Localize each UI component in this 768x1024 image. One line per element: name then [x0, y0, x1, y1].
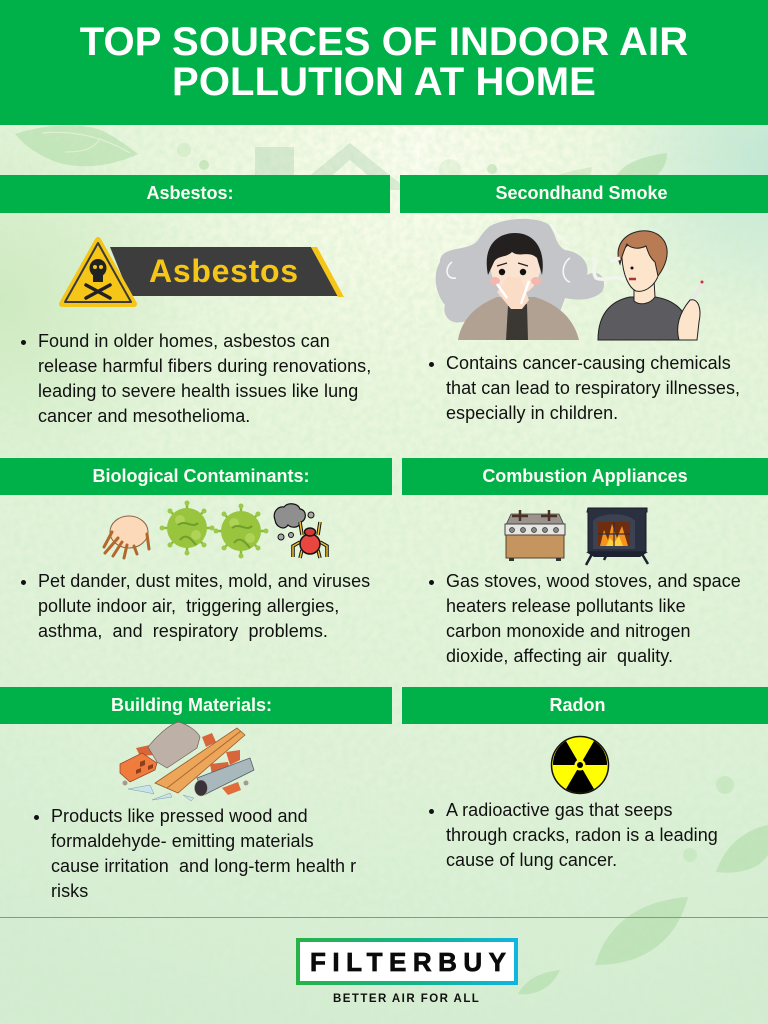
panel: biological contaminants [0, 458, 392, 641]
panel: building materials [0, 687, 392, 901]
heading: building materials [0, 687, 392, 724]
icon: rubble, brick, plank and pipe [120, 722, 254, 802]
text: radon description [429, 800, 718, 870]
text: building materials description [34, 806, 356, 901]
icon: virus two [214, 504, 268, 558]
text: combustion appliances description: Gas stoves, wood stoves, and space [446, 571, 741, 591]
heading: radon [402, 687, 768, 724]
text: asbestos description: release harmful fibers during renovations, [38, 356, 371, 376]
text: building materials description: cause irritation and long-term health r [51, 856, 356, 876]
icon: wood stove [584, 508, 649, 566]
text: secondhand smoke description: especially in children. [446, 403, 618, 423]
heading: combustion appliances [402, 458, 768, 495]
heading: biological contaminants [0, 458, 392, 495]
text: asbestos description: Found in older homes, asbestos can [38, 331, 330, 351]
logo box [296, 938, 518, 985]
text: secondhand smoke description [429, 353, 740, 423]
title banner [0, 0, 768, 125]
heading: secondhand smoke: Secondhand Smoke [495, 183, 668, 203]
text: biological contaminants description [21, 571, 370, 641]
text: building materials description: Products like pressed wood and [51, 806, 308, 826]
text: biological contaminants description: pollute indoor air, triggering allergies, [38, 596, 339, 616]
panel: combustion appliances [402, 458, 768, 666]
heading: biological contaminants: Biological Contaminants: [92, 466, 310, 486]
text: asbestos description: cancer and mesothelioma. [38, 406, 250, 426]
panel: secondhand smoke [114, 175, 768, 792]
heading: secondhand smoke [400, 175, 768, 213]
panel: asbestos [0, 175, 390, 757]
icon: gas stove [504, 510, 566, 561]
icon: dust mite [102, 516, 150, 560]
icon: virus one [160, 500, 214, 556]
text: radon description: through cracks, radon is a leading [446, 825, 718, 845]
tagline: BETTER AIR FOR ALL [333, 993, 480, 1005]
text: combustion appliances description: carbon monoxide and nitrogen [446, 621, 691, 641]
icon: smoke cloud and red mite [274, 503, 329, 558]
text: combustion appliances description: dioxide, affecting air quality. [446, 646, 673, 666]
heading: asbestos [0, 175, 390, 213]
title banner: TOP SOURCES OF INDOOR AIR [80, 20, 688, 64]
text: secondhand smoke description: that can lead to respiratory illnesses, [446, 378, 740, 398]
icon: asbestos warning sign [59, 237, 344, 757]
logo: Filterbuy [296, 938, 518, 1005]
text: secondhand smoke description: Contains cancer-causing chemicals [446, 353, 731, 373]
heading: radon: Radon [550, 695, 606, 715]
text: radon description: A radioactive gas that seeps [446, 800, 673, 820]
text: radon description: cause of lung cancer. [446, 850, 617, 870]
icon: radiation symbol [550, 736, 610, 794]
text: combustion appliances description: heaters release pollutants like [446, 596, 686, 616]
text: building materials description: risks [51, 881, 88, 901]
logo box: FILTERBUY [310, 947, 506, 977]
text: asbestos description: leading to severe health issues like lung [38, 381, 358, 401]
text: building materials description: formaldehyde- emitting materials [51, 831, 314, 851]
title banner: POLLUTION AT HOME [172, 60, 596, 104]
text: biological contaminants description: Pet dander, dust mites, mold, and viruses [38, 571, 370, 591]
icon: asbestos warning sign: Asbestos [149, 253, 298, 289]
text: combustion appliances description [429, 571, 741, 666]
text: biological contaminants description: asthma, and respiratory problems. [38, 621, 328, 641]
heading: asbestos: Asbestos: [146, 183, 234, 203]
text: asbestos description [21, 331, 371, 426]
heading: building materials: Building Materials: [111, 695, 272, 715]
panel: radon [402, 687, 768, 870]
heading: combustion appliances: Combustion Appliances [482, 466, 688, 486]
icon: two people and cigarette smoke [436, 218, 704, 340]
